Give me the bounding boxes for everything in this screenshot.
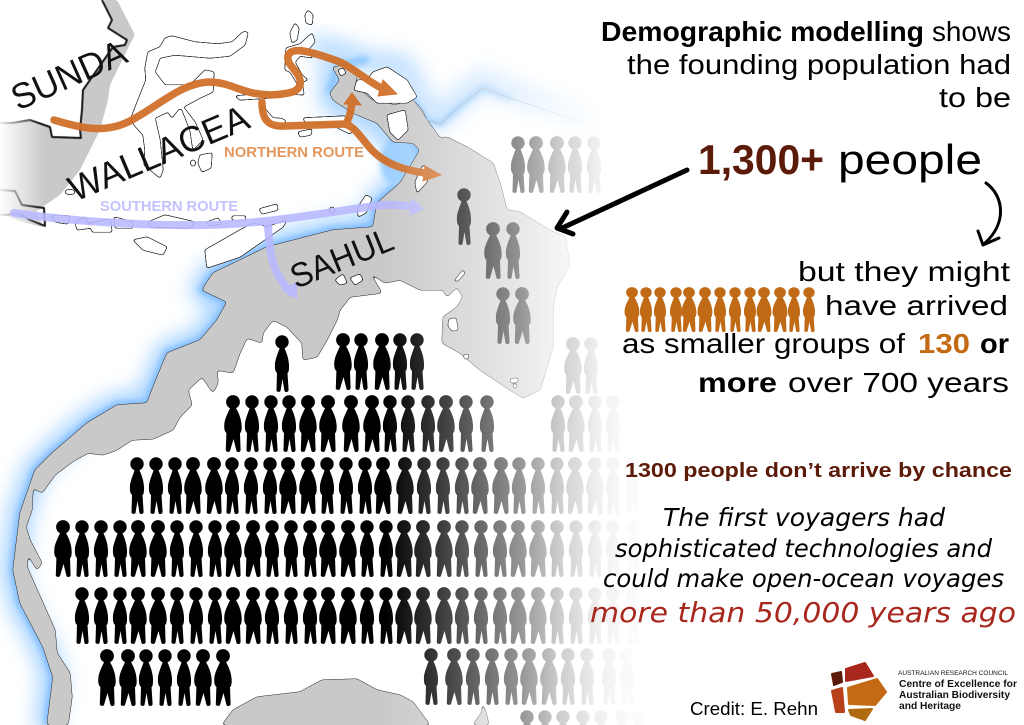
- row 2: [224, 395, 620, 452]
- northern route arrows: [54, 51, 441, 181]
- text block: first voyagers: sophisticated technologies and: [615, 534, 992, 563]
- arrow: curved down to text: [978, 183, 1001, 245]
- credit: Credit: E. Rehn: [690, 699, 818, 719]
- logo text: and Heritage: [899, 700, 961, 712]
- text block: smaller groups: [622, 256, 1010, 398]
- row 7: [520, 710, 645, 725]
- text block: first voyagers: [590, 503, 1016, 629]
- heading: demographic modelling: Demographic modelling: [601, 16, 924, 47]
- label: SUNDA: SUNDA: [5, 31, 133, 118]
- logo: CABAH: [832, 663, 886, 720]
- key number: 1,300+ people: [698, 136, 982, 183]
- map of Sunda, Wallacea and Sahul: [0, 0, 640, 725]
- text block: smaller groups: as smaller groups of: [622, 328, 905, 359]
- label: WALLACEA: WALLACEA: [62, 97, 255, 209]
- land: Sahul, New Guinea and north Australia: [13, 65, 570, 725]
- row 3: [130, 457, 639, 514]
- text block: smaller groups: 130: [918, 328, 970, 359]
- row 6: [98, 648, 634, 706]
- southern route arrows: [14, 199, 423, 298]
- Wallacea islands: [52, 10, 518, 388]
- text block: first voyagers: The first voyagers had: [663, 503, 945, 532]
- arrow: pointing to New Guinea: [557, 170, 687, 234]
- heading: demographic modelling: [601, 16, 1011, 113]
- label: SAHUL: SAHUL: [285, 221, 399, 296]
- text block: smaller groups: but they might: [798, 256, 1010, 287]
- text block: smaller groups: over 700 years: [788, 367, 1009, 398]
- key number: 1,300+ people: people: [838, 136, 982, 183]
- fade of map and people toward the text column: [385, 0, 665, 725]
- heading: demographic modelling: to be: [939, 82, 1011, 113]
- text block: smaller groups: more: [698, 367, 777, 398]
- upper coast line: [413, 88, 640, 150]
- pictogram: 130 people: [625, 287, 815, 332]
- logo text: Centre of Excellence for: [899, 678, 1017, 690]
- subheading: 1300 people don't arrive by chance: 1300 people don’t arrive by chance: [625, 460, 1012, 482]
- text block: smaller groups: or: [980, 328, 1009, 359]
- heading: demographic modelling: the founding population had: [627, 49, 1011, 80]
- label: Northern route: NORTHERN ROUTE: [224, 144, 364, 161]
- row 4: [54, 520, 640, 577]
- row 5: [75, 587, 640, 644]
- text block: first voyagers: could make open-ocean voyages: [603, 564, 1004, 593]
- logo text: Australian Biodiversity: [899, 689, 1010, 701]
- text block: first voyagers: more than 50,000 years ago: [590, 596, 1016, 629]
- New Guinea people: [457, 136, 601, 394]
- land: southern cape: [473, 702, 489, 725]
- text block: smaller groups: have arrived: [825, 290, 1008, 321]
- coastal water glow: [13, 45, 590, 722]
- heading: demographic modelling: shows: [932, 16, 1011, 47]
- map labels: [5, 31, 399, 296]
- logo text: AUSTRALIAN RESEARCH COUNCIL: [898, 670, 1008, 677]
- land: south Australia shelf: [222, 679, 430, 725]
- key number: 1,300+ people: 1,300+: [698, 136, 824, 183]
- land: Sunda: [0, 0, 135, 228]
- logo text: [898, 670, 1017, 712]
- row 1: [275, 333, 424, 392]
- label: Southern route: SOUTHERN ROUTE: [100, 198, 238, 215]
- pictogram: 1,300 founding people: [54, 136, 645, 725]
